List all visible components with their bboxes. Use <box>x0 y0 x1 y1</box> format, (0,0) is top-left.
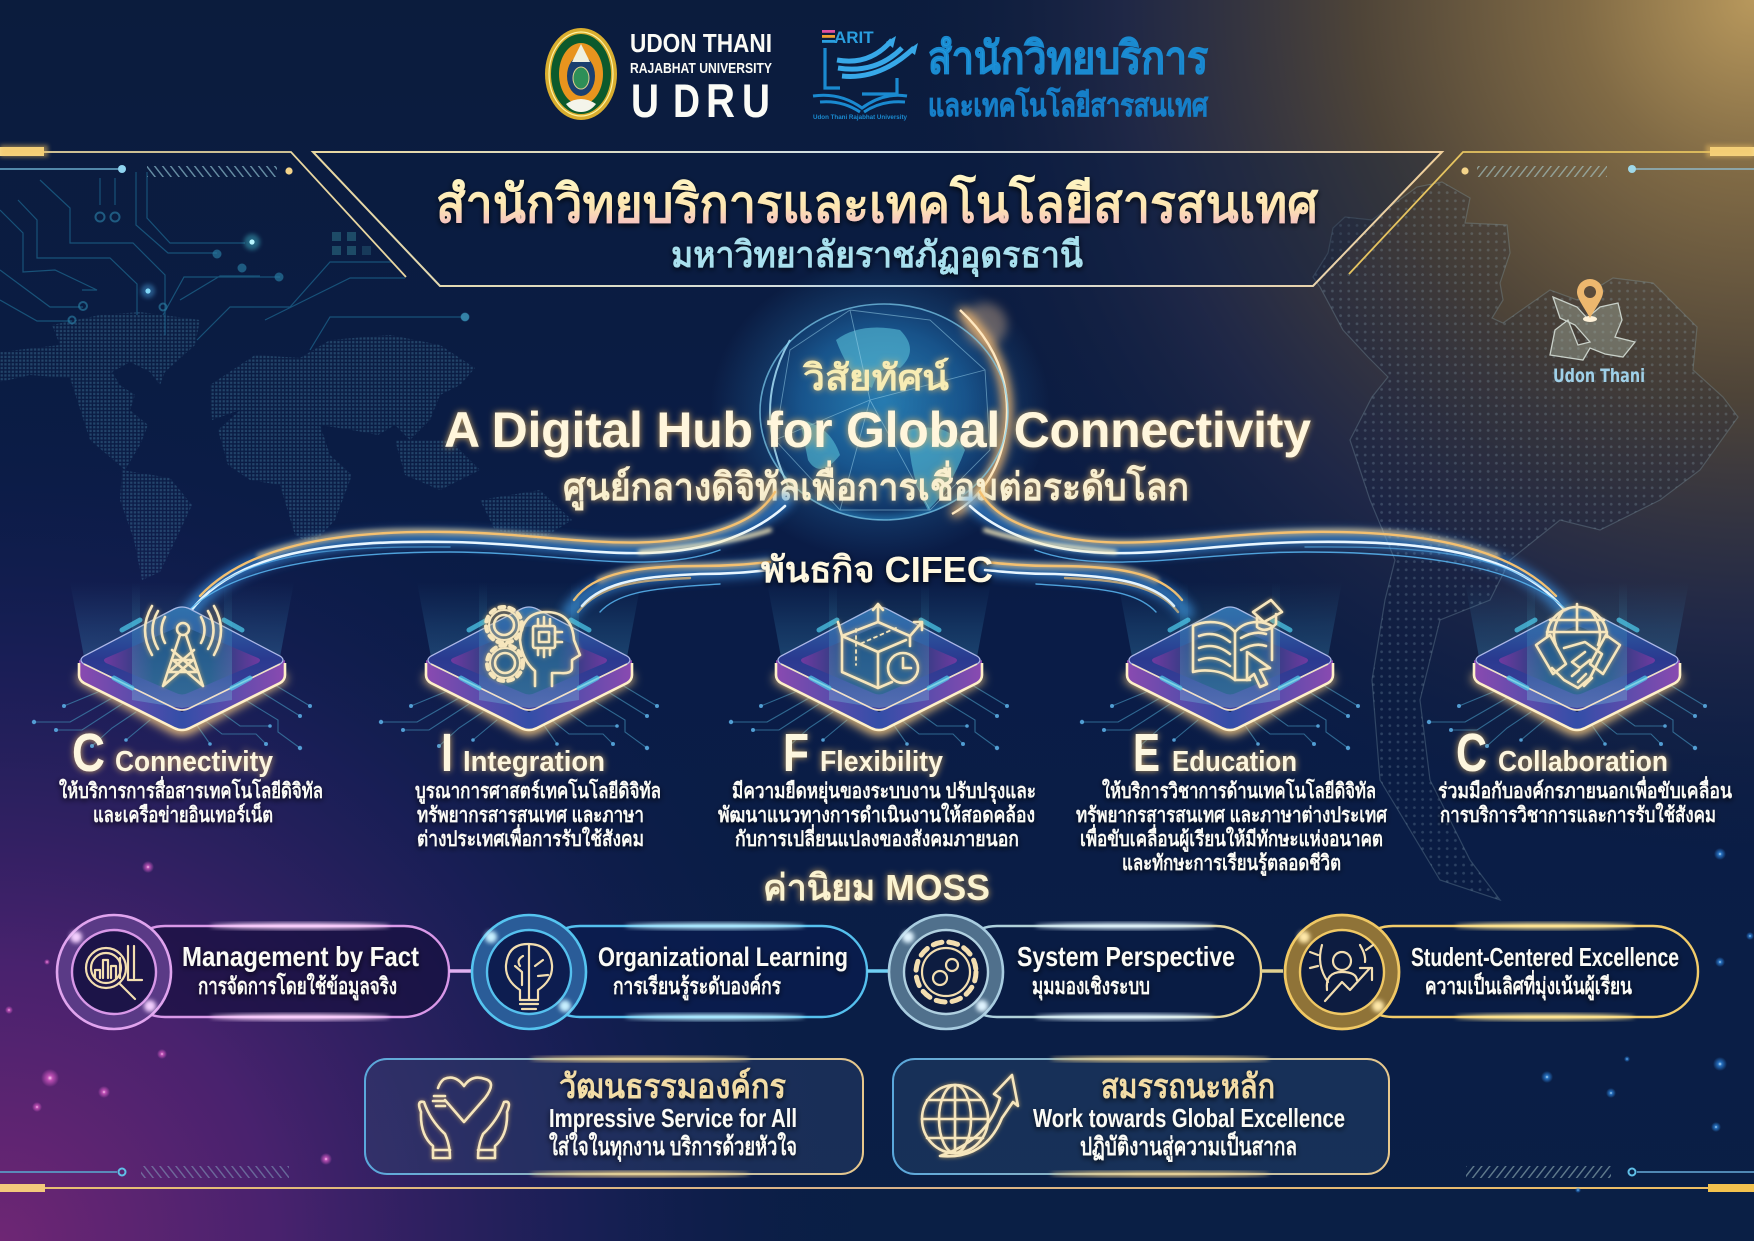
icon: radio tower <box>145 606 221 686</box>
mission heading: พันธกิจ CIFEC <box>761 549 993 590</box>
title frame <box>313 152 1442 286</box>
platform: Connectivity <box>32 582 312 750</box>
globe <box>710 260 1050 560</box>
platform: Integration <box>379 582 659 750</box>
description: Flexibility: พัฒนาแนวทางการดำเนินงานให้สอดคล้อง <box>718 802 1035 827</box>
value pill: System Perspective <box>889 915 1283 1029</box>
title: สำนักวิทยบริการและเทคโนโลยีสารสนเทศ <box>436 173 1319 234</box>
logo: UDON THANI wordmark: D <box>673 74 700 127</box>
value pill: Organizational Learning: Organizational Learning <box>598 942 848 972</box>
circuit lines top-left <box>0 172 465 350</box>
panel: core competency: ปฏิบัติงานสู่ความเป็นสากล <box>1080 1131 1297 1163</box>
label: Connectivity <box>72 723 273 783</box>
Udon Thani province and pin: Udon Thani <box>1553 365 1645 387</box>
logo: ARIT emblem: Udon Thani Rajabhat University <box>813 114 907 121</box>
value pill: System Perspective: มุมมองเชิงระบบ <box>1032 973 1150 1001</box>
logo: UDON THANI wordmark: R <box>706 74 735 127</box>
label: Flexibility <box>783 723 943 783</box>
label: Collaboration <box>1456 723 1668 783</box>
label: Integration <box>441 723 605 783</box>
vision in Thai: ศูนย์กลางดิจิทัลเพื่อการเชื่อมต่อระดับโลก <box>563 460 1189 511</box>
platform: Education <box>1080 582 1360 750</box>
description: Education <box>1076 778 1388 877</box>
description: Connectivity <box>59 775 323 827</box>
panel: organizational culture: วัฒนธรรมองค์กร <box>559 1067 787 1106</box>
logo: ARIT emblem <box>813 28 918 121</box>
value pill: System Perspective: System Perspective <box>1017 941 1235 972</box>
platform: Flexibility <box>729 582 1009 750</box>
energy ribbons <box>180 492 1576 620</box>
logo: UDON THANI wordmark: RAJABHAT UNIVERSITY <box>630 61 772 77</box>
values heading: ค่านิยม MOSS <box>763 867 990 908</box>
value pill: Student-Centered Excellence <box>1285 915 1698 1029</box>
description: Integration: บูรณาการศาสตร์เทคโนโลยีดิจิทัล <box>415 778 661 805</box>
panel: core competency <box>893 1056 1389 1176</box>
glowing nodes <box>141 232 469 321</box>
value pill: Management by Fact: การจัดการโดยใช้ข้อมูลจริง <box>198 972 397 1001</box>
icon: globe and handshake <box>1536 604 1620 688</box>
circuit nodes <box>68 212 468 324</box>
description: Integration: ทรัพยากรสารสนเทศ และภาษา <box>417 804 644 827</box>
logo: UDON THANI wordmark <box>630 28 772 127</box>
label: Flexibility: F <box>783 723 809 783</box>
top-right frame <box>1349 145 1754 274</box>
panel: organizational culture <box>365 1056 863 1176</box>
value pill: Management by Fact: Management by Fact <box>182 941 419 972</box>
label: Education: Education <box>1172 746 1297 778</box>
description: Flexibility: มีความยืดหยุ่นของระบบงาน ปรับปรุงและ <box>732 779 1036 805</box>
icon: AI head with gears <box>486 607 580 686</box>
logo: ARIT emblem: ARIT <box>834 28 874 47</box>
vision heading: วิสัยทัศน์ <box>802 357 949 398</box>
description: Education: ให้บริการวิชาการด้านเทคโนโลยีดิจิทัล <box>1102 778 1376 803</box>
label: Collaboration: Collaboration <box>1498 746 1668 778</box>
icon: cube with clock <box>838 604 922 688</box>
label: Flexibility: Flexibility <box>820 746 943 778</box>
description: Integration: ต่างประเทศเพื่อการรับใช้สังคม <box>417 823 644 851</box>
dotted world map <box>0 312 572 580</box>
description: Collaboration <box>1438 775 1733 827</box>
logo: UDON THANI wordmark: UDON THANI <box>630 28 772 58</box>
label: Education <box>1133 723 1297 783</box>
bottom frame <box>0 1166 1754 1192</box>
value pill: Organizational Learning: การเรียนรู้ระดับองค์กร <box>613 973 781 1001</box>
Udon Thani province and pin <box>1550 279 1645 387</box>
description: Education: ทรัพยากรสารสนเทศ และภาษาต่างประเทศ <box>1076 804 1388 827</box>
label: Integration: Integration <box>463 746 605 778</box>
panel: organizational culture: ใส่ใจในทุกงาน บริการด้วยหัวใจ <box>549 1131 797 1163</box>
description: Connectivity: และเครือข่ายอินเทอร์เน็ต <box>93 801 273 827</box>
panel: core competency: Work towards Global Excellence <box>1033 1103 1345 1133</box>
logo: department name: สำนักวิทยบริการ <box>928 34 1208 83</box>
label: Connectivity: C <box>72 723 105 783</box>
description: Education: และทักษะการเรียนรู้ตลอดชีวิต <box>1122 851 1341 877</box>
description: Connectivity: ให้บริการการสื่อสารเทคโนโลยีดิจิทัล <box>59 775 323 803</box>
label: Education: E <box>1133 723 1160 783</box>
label: Connectivity: Connectivity <box>115 746 273 778</box>
Thailand dotted map <box>1313 182 1738 900</box>
description: Flexibility: กับการเปลี่ยนแปลงของสังคมภายนอก <box>735 823 1019 851</box>
logo: UDON THANI wordmark: U <box>742 74 770 127</box>
description: Flexibility <box>718 779 1036 851</box>
logo: UDON THANI wordmark: U <box>631 74 659 127</box>
panel: core competency: สมรรถนะหลัก <box>1101 1068 1275 1106</box>
label: Integration: I <box>441 723 453 783</box>
icon: open book with cap <box>1193 600 1282 687</box>
logo: department name <box>928 34 1209 123</box>
panel: organizational culture: Impressive Service for All <box>549 1103 797 1133</box>
sparkles <box>5 848 1754 1193</box>
value pill: Management by Fact <box>57 915 471 1029</box>
top-left frame <box>0 145 406 277</box>
icon: globe with rising arrow <box>922 1075 1018 1156</box>
description: Integration <box>415 778 661 851</box>
value pill: Student-Centered Excellence: ความเป็นเลิศที่มุ่งเน้นผู้เรียน <box>1425 969 1632 1001</box>
logo: university seal <box>545 28 617 120</box>
label: Collaboration: C <box>1456 723 1487 783</box>
subtitle: มหาวิทยาลัยราชภัฏอุดรธานี <box>671 234 1083 278</box>
icon: heart in hands <box>419 1078 509 1158</box>
platform: Collaboration <box>1427 582 1707 750</box>
description: Education: เพื่อขับเคลื่อนผู้เรียนให้มีทักษะแห่งอนาคต <box>1080 823 1383 853</box>
logo: department name: และเทคโนโลยีสารสนเทศ <box>928 87 1209 123</box>
vision statement: A Digital Hub for Global Connectivity <box>444 402 1311 458</box>
value pill: Organizational Learning <box>472 915 889 1029</box>
